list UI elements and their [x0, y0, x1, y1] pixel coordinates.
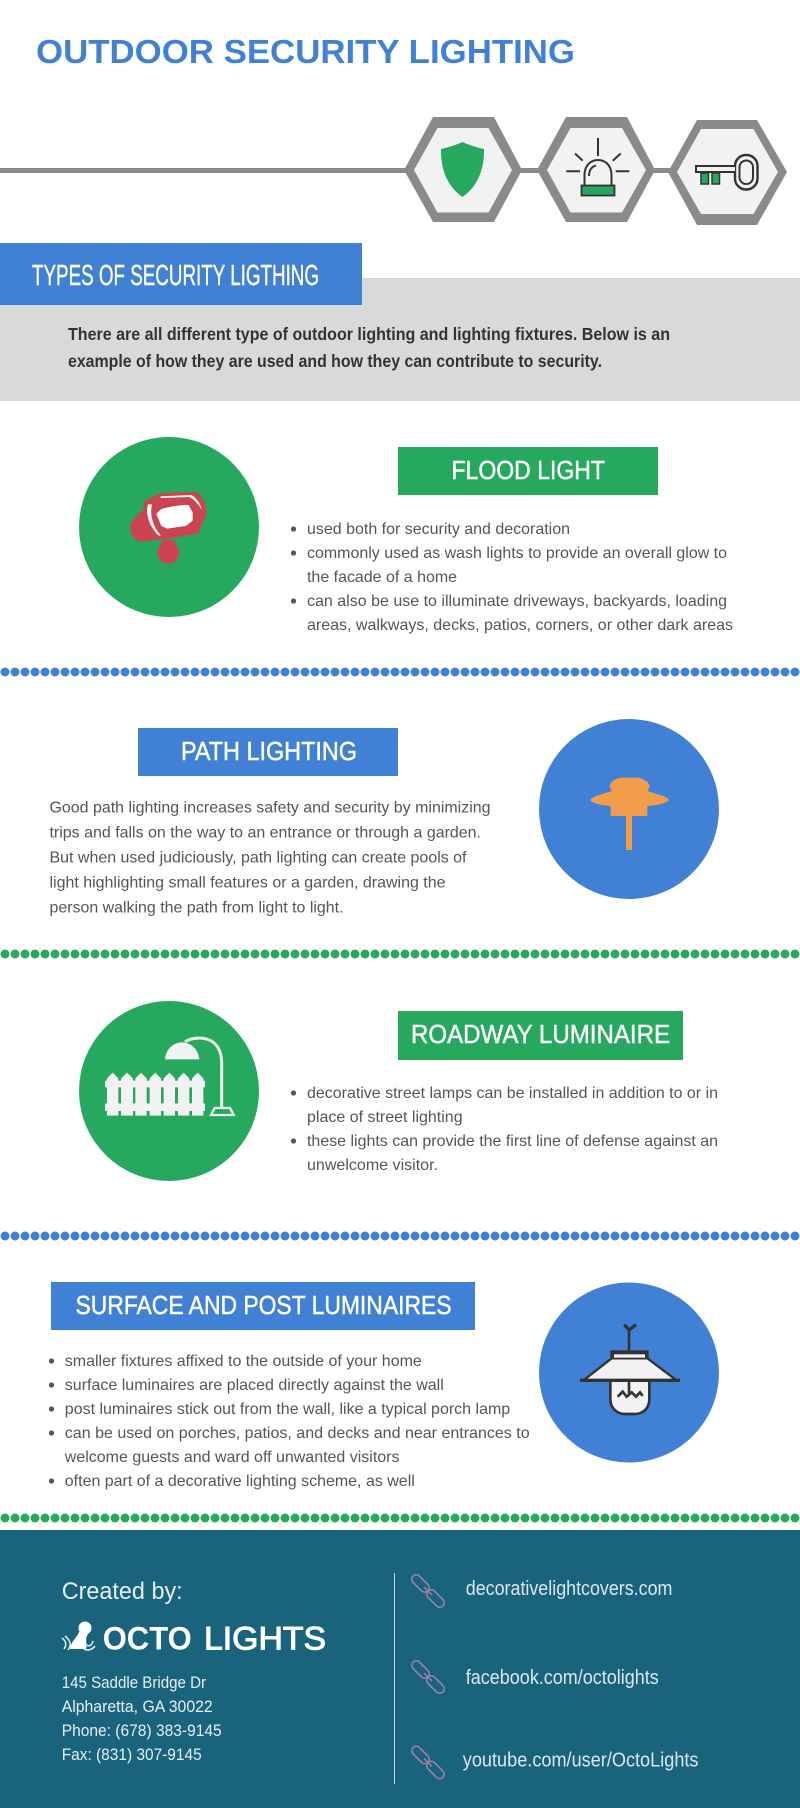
- icon: chain link: [410, 1744, 446, 1781]
- section heading: TYPES OF SECURITY LIGTHING: [32, 260, 319, 292]
- address: 145 Saddle Bridge Dr: [62, 1673, 206, 1692]
- icon: shield hexagon: [404, 117, 522, 222]
- icon: alarm siren hexagon: [537, 117, 655, 222]
- hexagon timeline with icons: [0, 117, 787, 225]
- link row: facebook: [410, 1659, 659, 1695]
- paragraph: path lighting: light highlighting small features or a garden, drawing the: [50, 874, 446, 892]
- bullet list: surface and post luminaires: surface luminaires are placed directly against the wall: [65, 1377, 444, 1394]
- bullet list: roadway luminaire: decorative street lamps can be installed in addition to or in: [307, 1085, 718, 1102]
- bullet list: roadway luminaire: unwelcome visitor.: [307, 1157, 438, 1174]
- bullet list: surface and post luminaires: often part of a decorative lighting scheme, as well: [65, 1473, 415, 1490]
- link row: facebook: facebook.com/octolights: [466, 1667, 659, 1689]
- panel: roadway luminaire: [79, 1001, 718, 1181]
- bullet list: roadway luminaire: [291, 1085, 718, 1174]
- panel: path lighting: [50, 719, 719, 916]
- heading: surface and post luminaires: [51, 1282, 475, 1330]
- panel: footer: [0, 1530, 800, 1808]
- heading: flood light: [398, 447, 658, 495]
- icon: key hexagon: [668, 120, 787, 225]
- icon: octopus: [62, 1622, 95, 1650]
- bullet list: surface and post luminaires: smaller fixtures affixed to the outside of your home: [65, 1353, 422, 1370]
- heading: roadway luminaire: ROADWAY LUMINAIRE: [411, 1019, 670, 1049]
- heading: path lighting: PATH LIGHTING: [181, 736, 357, 766]
- bullet list: flood light: [291, 521, 733, 634]
- intro text: There are all different type of outdoor lighting and lighting fixtures. Below is an: [68, 324, 670, 344]
- bullet list: surface and post luminaires: welcome guests and ward off unwanted visitors: [64, 1449, 399, 1466]
- icon: path light: [539, 719, 719, 899]
- address: Alpharetta, GA 30022: [62, 1697, 213, 1716]
- address: [62, 1673, 222, 1764]
- link row: website: decorativelightcovers.com: [466, 1578, 672, 1600]
- paragraph: path lighting: trips and falls on the way to an entrance or through a garden.: [50, 824, 481, 842]
- bullet list: surface and post luminaires: [49, 1353, 530, 1490]
- logo: octo lights: [62, 1620, 326, 1656]
- heading: roadway luminaire: [398, 1011, 683, 1060]
- bullet list: flood light: used both for security and decoration: [307, 521, 570, 538]
- bullet list: surface and post luminaires: post luminaires stick out from the wall, like a typical porch lamp: [65, 1401, 510, 1418]
- paragraph: path lighting: But when used judiciously, path lighting can create pools of: [50, 850, 467, 866]
- bullet list: flood light: the facade of a home: [307, 569, 457, 586]
- link row: youtube: [410, 1744, 698, 1781]
- intro text: [68, 324, 670, 371]
- heading: path lighting: [138, 728, 398, 776]
- paragraph: path lighting: Good path lighting increases safety and security by minimizing: [50, 800, 490, 816]
- link row: website: [410, 1573, 672, 1609]
- heading: flood light: FLOOD LIGHT: [452, 455, 605, 485]
- bullet list: flood light: areas, walkways, decks, patios, corners, or other dark areas: [307, 617, 733, 634]
- panel: types of security lighting intro: [0, 243, 800, 401]
- icon: fence and street lamp: [79, 1001, 259, 1181]
- intro text: example of how they are used and how they can contribute to security.: [68, 351, 602, 371]
- address: Fax: (831) 307-9145: [62, 1745, 202, 1764]
- bullet list: roadway luminaire: place of street lighting: [307, 1109, 463, 1126]
- address: Phone: (678) 383-9145: [62, 1721, 222, 1740]
- panel: surface and post luminaires: [49, 1282, 719, 1490]
- title: OUTDOOR SECURITY LIGHTING: [36, 33, 575, 70]
- icon: flood light: [79, 437, 259, 617]
- icon: chain link: [410, 1573, 446, 1609]
- bullet list: flood light: can also be use to illuminate driveways, backyards, loading: [307, 593, 727, 610]
- bullet list: roadway luminaire: these lights can provide the first line of defense against an: [307, 1133, 718, 1150]
- paragraph: path lighting: [50, 800, 490, 916]
- bullet list: surface and post luminaires: can be used on porches, patios, and decks and near entrances to: [65, 1425, 530, 1442]
- icon: chain link: [410, 1659, 446, 1695]
- paragraph: path lighting: person walking the path from light to light.: [50, 900, 344, 916]
- icon: hanging lamp: [539, 1282, 719, 1462]
- logo: octo lights: LIGHTS: [204, 1620, 326, 1656]
- bullet list: flood light: commonly used as wash lights to provide an overall glow to: [307, 545, 727, 562]
- logo: octo lights: OCTO: [103, 1620, 192, 1656]
- link row: youtube: youtube.com/user/OctoLights: [463, 1750, 698, 1772]
- created by label: Created by:: [62, 1578, 183, 1605]
- heading: surface and post luminaires: SURFACE AND POST LUMINAIRES: [76, 1290, 452, 1320]
- panel: flood light: [79, 437, 733, 634]
